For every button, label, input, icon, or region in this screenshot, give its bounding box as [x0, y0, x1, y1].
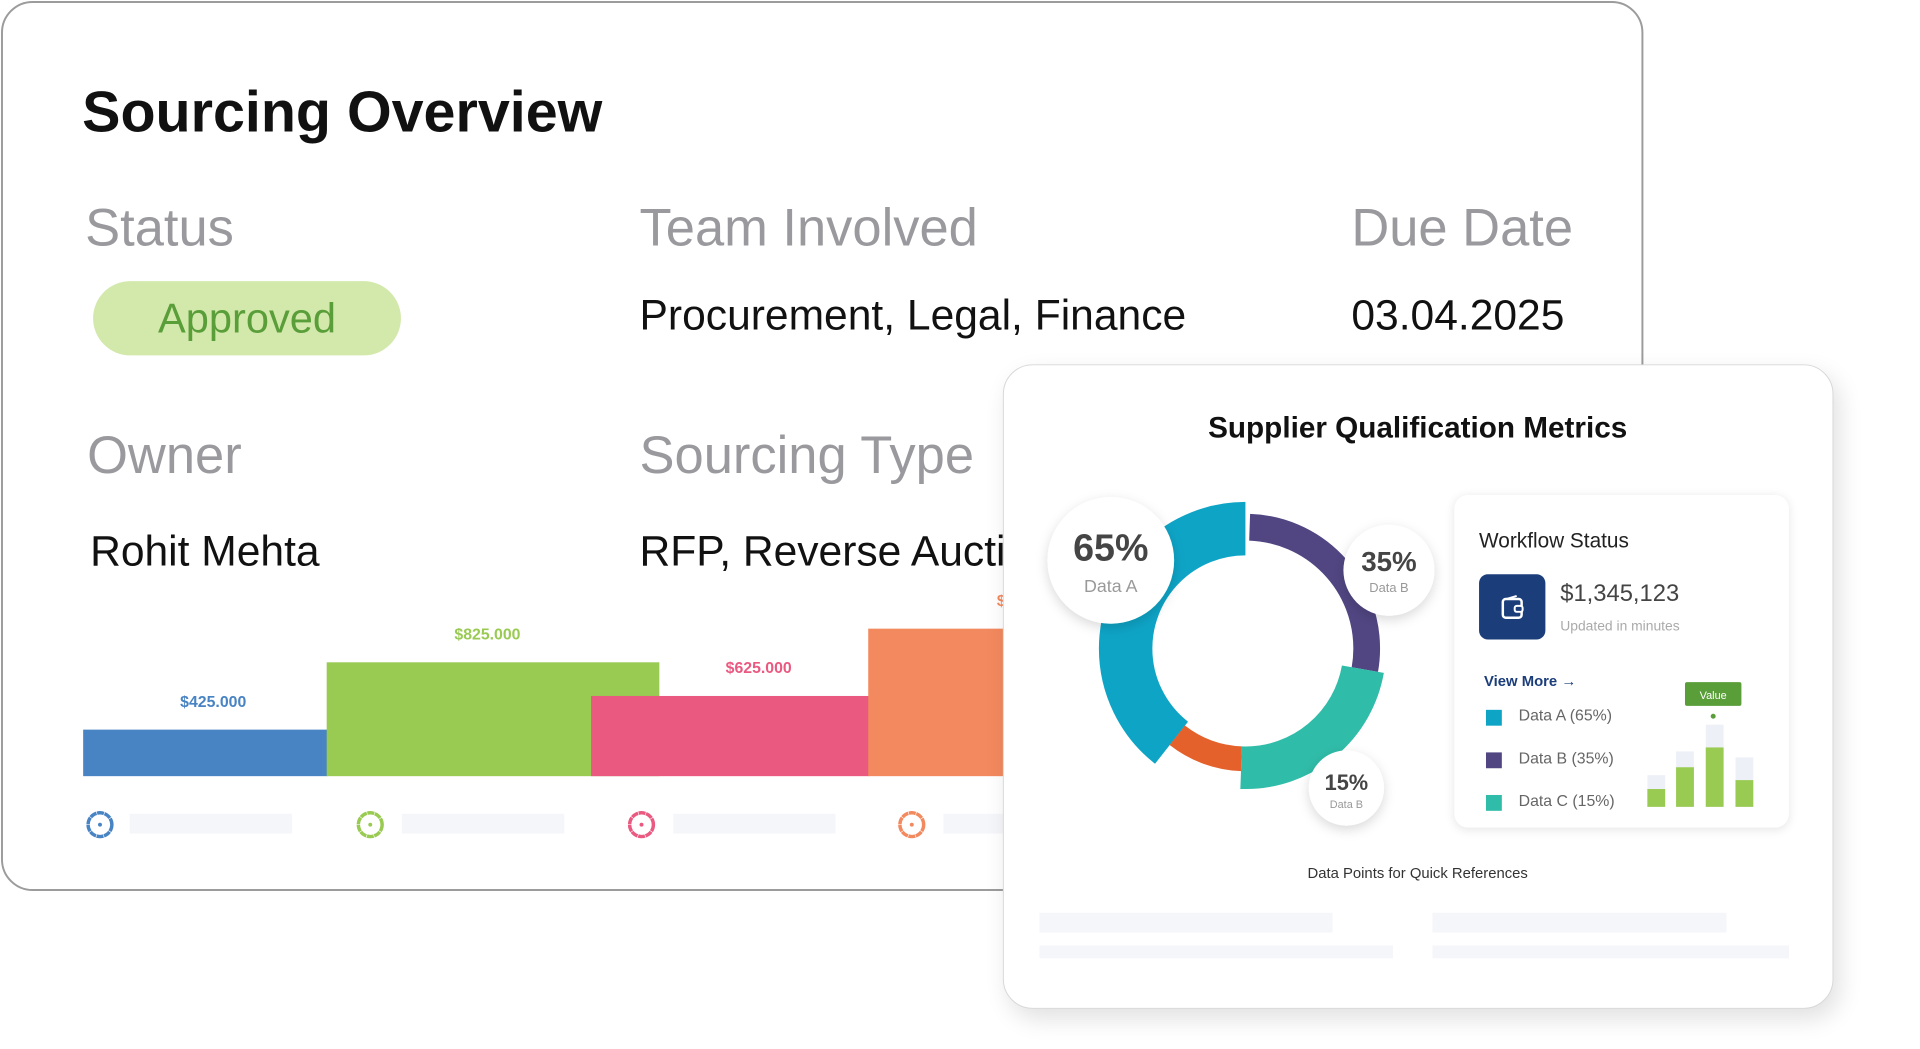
bubble: 65% data A	[1047, 497, 1174, 624]
amount: $1,345,123	[1560, 580, 1679, 607]
icon: wallet	[1479, 574, 1545, 640]
tooltip: value: Value	[1700, 690, 1727, 702]
bubble: 35% data B	[1343, 525, 1435, 616]
label: due date: Due Date	[1351, 199, 1573, 257]
bar: orange	[868, 629, 1092, 776]
status pill: approved	[93, 281, 401, 355]
card title: Supplier Qualification Metrics	[1208, 412, 1627, 445]
legend: Data A (65%)	[1519, 708, 1612, 725]
label: owner: Owner	[87, 427, 242, 485]
value label: 825: $825.000	[454, 627, 520, 644]
label: status: Status	[85, 199, 234, 257]
value: owner: Rohit Mehta	[90, 528, 320, 575]
bar: green 825	[327, 662, 659, 776]
donut chart	[1044, 498, 1438, 834]
bubble: 15% data B: 15%	[1325, 770, 1368, 795]
value: sourcing type: RFP, Reverse Auction	[640, 528, 1053, 575]
bar: blue 425	[83, 730, 328, 776]
panel: workflow status	[1454, 495, 1789, 828]
legend icons row	[86, 811, 1002, 838]
bubble: 35% data B: 35%	[1361, 546, 1417, 577]
icon: pink gear	[628, 811, 656, 838]
bubble: 35% data B: Data B	[1369, 580, 1409, 595]
panel: supplier qualification metrics card	[1003, 364, 1833, 1009]
mini bar chart	[1647, 682, 1754, 807]
panel: sourcing overview card	[1, 1, 1643, 891]
icon: blue gear	[86, 811, 114, 838]
placeholder rows	[1040, 913, 1789, 958]
bar chart: costs	[83, 593, 1063, 776]
icon: green gear	[356, 811, 384, 838]
title: Sourcing Overview	[82, 80, 602, 145]
legend	[1486, 708, 1615, 811]
bubble: 15% data B: Data B	[1330, 799, 1363, 811]
value label: orange: $925.000	[997, 593, 1063, 610]
label: sourcing type: Sourcing Type	[640, 427, 974, 485]
legend: Data B (35%)	[1519, 750, 1614, 767]
bubble: 65% data A: 65%	[1073, 526, 1148, 568]
link: view more: View More →	[1484, 673, 1576, 690]
value label: 625: $625.000	[726, 660, 792, 677]
icon: orange gear	[898, 811, 926, 838]
status pill: approved: Approved	[158, 295, 336, 342]
heading: workflow status: Workflow Status	[1479, 530, 1629, 552]
value: teams: Procurement, Legal, Finance	[640, 292, 1186, 340]
legend: Data C (15%)	[1519, 793, 1615, 810]
bubble: 15% data B	[1309, 750, 1384, 826]
subtext: Updated in minutes	[1560, 618, 1680, 634]
tooltip: value	[1685, 682, 1741, 706]
caption: data points: Data Points for Quick References	[1307, 865, 1528, 882]
value: due date: 03.04.2025	[1351, 292, 1564, 340]
bar: pink 625	[591, 696, 869, 776]
bubble: 65% data A: Data A	[1084, 576, 1138, 596]
label: team involved: Team Involved	[640, 199, 978, 257]
value label: 425: $425.000	[180, 694, 246, 711]
